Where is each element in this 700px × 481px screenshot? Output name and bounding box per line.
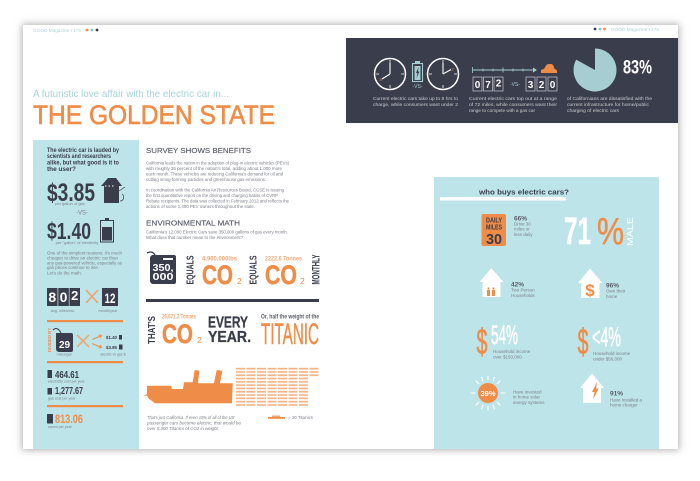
pie chart: 83 percent <box>574 48 617 91</box>
text block: california caption: over 5,300 Titanics of CO2 in weight. <box>147 426 219 431</box>
stat: gas cost per year <box>48 386 83 400</box>
counter: 802 miles per month <box>47 288 80 306</box>
legend: 20 titanics <box>268 415 314 420</box>
charging caption: charge, while consumers want under 2 <box>373 102 458 108</box>
icon: daily miles 30 sign: 30 <box>486 231 502 248</box>
stat: 96 percent: Own their <box>606 288 626 294</box>
counter: 12 months: 12 <box>104 290 116 306</box>
text block: california caption: passenger cars became electric, that would be <box>146 420 241 426</box>
text block: survey paragraph one <box>146 160 289 183</box>
stat: 42 percent: Households <box>511 293 536 298</box>
text block: california caption: That's just California. If even 10% of all of the US' <box>147 415 236 420</box>
stat: 83 percent: 83% <box>623 58 652 78</box>
stat: 91 percent: Have installed a <box>610 398 643 402</box>
icon: sun 39 percent <box>471 376 505 410</box>
stat: every year <box>208 314 251 346</box>
counter: 320 miles <box>526 77 557 91</box>
text block: survey paragraph two <box>146 188 289 210</box>
icon: clock 2 hours <box>428 58 458 90</box>
stat: 26,671.2 tonnes CO2: 2 <box>197 335 202 345</box>
dissatisfaction caption: current infrastructure for home/public <box>567 102 650 108</box>
explanatory paragraph: any gas-powered vehicle, especially as <box>47 260 123 266</box>
text block: environmental intro: What does that number mean to the environment? <box>146 235 243 241</box>
caption: miles per month: avg. miles/mo. <box>51 309 75 313</box>
stat: 91 percent: 91% <box>610 390 623 398</box>
intro text: alike, but what good is it to <box>47 160 119 166</box>
stat: 91 percent: home charger <box>610 402 638 408</box>
stat: income over 150k: Household income <box>493 349 531 354</box>
icon: house with two people <box>480 268 504 297</box>
stat: saved per year: saved per year <box>48 425 73 429</box>
label: divided by: DIVIDED BY <box>47 328 52 352</box>
explanatory paragraph <box>47 250 123 276</box>
heading: survey shows benefits: SURVEY SHOWS BENEFITS <box>146 146 251 155</box>
text block: environmental intro: California's 12,000 Electric Cars save 350,000 gallons of gas every month. <box>146 230 288 236</box>
stat: 42 percent: 42% <box>511 282 524 288</box>
stat: 42 percent <box>511 282 536 298</box>
counter: 802 miles per month: 8 <box>48 289 56 305</box>
stat: electricity price: $1.40 <box>47 218 91 244</box>
dissatisfaction caption: of Californians are dissatisfied with the <box>567 96 652 102</box>
arrow: range scale <box>472 67 537 73</box>
range caption: range to compete with a gas car <box>469 108 535 114</box>
stat: income over 150k <box>476 320 531 362</box>
panel: cost sidebar <box>33 140 139 449</box>
icon: gas pump <box>101 178 125 203</box>
icon: clock 8 hours <box>374 58 406 90</box>
stat: 4,900,000 lbs CO2: CO <box>202 260 233 290</box>
divider bar <box>47 405 123 407</box>
heading: environmental math: ENVIRONMENTAL MATH <box>146 218 240 228</box>
caption: miles per gallon: miles/gal <box>57 352 72 356</box>
text block: survey paragraph one: each month. These vehicles are reducing California's demand for oil and <box>146 172 283 178</box>
text block: survey paragraph two: actions of some 1,400 PEV owners throughout the state. <box>146 204 255 210</box>
icon: battery <box>100 218 114 242</box>
stat: 66 percent: Drive 30 <box>514 222 531 226</box>
counter: 072 miles: 0 <box>475 80 481 91</box>
right page header: GOOD Magazine I 179 <box>611 27 659 33</box>
caption: per gallon of electricity: per "gallon" of electricity <box>56 240 98 245</box>
text block: survey paragraph one: with roughly 35 percent of the nation's total, adding about 1,000 more <box>146 166 282 172</box>
arrows: electric vs gas <box>92 335 102 348</box>
stat: every year: EVERY <box>208 314 248 332</box>
caption: per gallon of gas: per gallon of gas <box>55 201 85 206</box>
stat: solar: Have invested <box>513 390 542 394</box>
stat: 4,900,000 lbs CO2: 4,900,000lbs <box>202 256 237 262</box>
explanatory paragraph: One of the simplest reasons: it's much <box>47 250 122 256</box>
label: equals: EQUALS <box>248 255 260 284</box>
panel: who buys electric cars <box>434 177 659 449</box>
icon: titanic ship silhouette <box>143 370 233 403</box>
counter: 320 miles: 0 <box>550 80 556 91</box>
label: that's: THAT'S <box>146 316 158 344</box>
icon: daily miles 30 sign: DAILY <box>486 218 502 224</box>
stat: 71 percent male: % <box>597 211 624 253</box>
stat: solar: energy systems <box>513 400 545 405</box>
stat: gas cost: $3.85 <box>106 345 117 350</box>
icon: house with dollar: $ <box>585 281 595 300</box>
counter: 802 miles per month: 2 <box>71 288 78 303</box>
icon: clock 2 hours: 2 <box>452 66 454 72</box>
counter: 802 miles per month: 0 <box>60 289 68 305</box>
label: equals: EQUALS <box>186 255 196 284</box>
counter: 320 miles: 2 <box>539 80 545 91</box>
stat: 71 percent male: MALE <box>625 217 635 246</box>
range caption: of 72 miles, while consumers want their <box>469 102 557 108</box>
subtitle: A futuristic love affair with the electric car in... <box>33 88 229 100</box>
stat: income over 150k: $ <box>476 321 488 362</box>
icon: daily miles 30 sign: MILES <box>486 224 502 232</box>
explanatory paragraph: gas prices continue to rise. <box>47 265 99 270</box>
left page header <box>33 28 98 34</box>
icon: sun 39 percent: 39% <box>480 389 496 398</box>
text block: environmental intro <box>146 230 288 241</box>
icon: orange car <box>541 64 557 73</box>
stat: 66 percent <box>514 216 533 237</box>
stat: gas cost per year: gas cost per year <box>48 396 76 400</box>
stat: 96 percent: 96% <box>606 282 619 290</box>
divider bar <box>146 299 319 302</box>
stat: 71 percent male <box>564 211 635 253</box>
stat: electricity cost per year <box>48 370 86 384</box>
icon: multiply <box>77 335 89 347</box>
vs label: -VS- <box>510 82 520 88</box>
counter: 072 miles: 2 <box>496 78 502 90</box>
counter: 320 miles: 3 <box>528 80 534 91</box>
stat: 26,671.2 tonnes CO2: CO <box>162 319 193 349</box>
range caption: Current electric cars top out at a range <box>469 96 557 102</box>
heading underline <box>440 197 566 200</box>
stat: 2222.6 tonnes CO2: CO <box>265 260 297 290</box>
charging caption: Current electric cars take up to 8 hrs to <box>373 96 458 102</box>
dissatisfaction caption: charging of electric cars <box>567 108 620 114</box>
intro text: The electric car is lauded by <box>47 148 120 154</box>
icon: house with bolt <box>580 374 604 403</box>
dissatisfaction caption <box>567 96 652 114</box>
intro text: the user? <box>47 167 76 173</box>
stat: electric cost: $1.40 <box>106 335 117 340</box>
panel: charging and range banner <box>346 38 678 123</box>
stat: every year: YEAR. <box>208 329 251 346</box>
icon: daily miles 30 sign <box>482 214 506 248</box>
icon: gas can 350,000: 000 <box>152 272 174 283</box>
label: monthly: MONTHLY <box>310 254 322 284</box>
text block: survey paragraph two: the first quantitative report on the driving and charging habits of CVRP <box>146 193 278 199</box>
stat: 42 percent: Two Person <box>511 288 535 292</box>
stat: gas cost <box>106 344 122 350</box>
stat: 96 percent <box>606 282 626 299</box>
explanatory paragraph: cheaper to drive an electric car than <box>47 256 118 260</box>
chart: grid of 20 titanics <box>236 367 320 407</box>
text block: survey paragraph two: Rebate recipients. The data was collected in February 2012 and reflects the <box>146 198 289 204</box>
stat: solar <box>513 390 545 405</box>
charging caption <box>373 96 458 108</box>
text block: california caption <box>146 415 241 431</box>
counter: 12 months <box>102 288 118 306</box>
stat: electricity cost per year: 464.61 <box>55 370 79 381</box>
left page header: GOOD Magazine I 178 <box>33 28 81 34</box>
stat: saved per year: 813.06 <box>55 414 83 426</box>
stat: saved per year <box>47 414 83 429</box>
stat: 96 percent: home <box>606 294 618 299</box>
caption: months per year: month/year <box>98 309 118 313</box>
icon: house with dollar <box>578 268 602 300</box>
stat: solar: in home solar <box>513 394 541 400</box>
text: half the weight of the: Or, half the weight of the <box>261 314 319 320</box>
stat: income under 50k: under $50,000 <box>593 356 623 362</box>
stat: 2222.6 tonnes CO2: 2 <box>300 276 305 286</box>
icon: battery charging: -VS- <box>412 84 423 90</box>
icon: gas can 29 <box>53 329 73 352</box>
text: titanic: TITANIC <box>261 318 319 351</box>
stat: 66 percent: miles or <box>514 226 530 232</box>
stat: 2222.6 tonnes CO2: 2222.6 Tonnes <box>265 256 302 262</box>
stat: income over 150k: 54% <box>491 320 518 350</box>
vs label: -VS- <box>76 210 88 216</box>
intro text: scientists and researchers <box>47 154 112 160</box>
stat: gas price: $3.85 <box>47 179 95 207</box>
range caption <box>469 96 557 114</box>
icon: gas can 350,000: 350, <box>152 263 174 274</box>
heading: who buys electric cars? <box>478 188 569 196</box>
legend: 20 titanics: = 20 Titanics <box>288 415 314 420</box>
explanatory paragraph: Let's do the math. <box>47 270 82 276</box>
divider bar <box>47 320 123 322</box>
stat: gas cost per year: 1,277.67 <box>55 386 83 397</box>
stat: electricity cost per year: electricity cost per year <box>48 380 86 384</box>
icon: gas can 350,000 <box>147 252 176 284</box>
stat: 66 percent: 66% <box>514 216 527 222</box>
divider bar <box>47 361 123 363</box>
counter: 072 miles <box>473 77 503 91</box>
stat: 26,671.2 tonnes CO2: 26,671.2 Tonnes <box>162 314 196 320</box>
right page header <box>594 27 659 33</box>
stat: income under 50k: Household income <box>593 351 631 356</box>
title: THE GOLDEN STATE <box>33 100 275 130</box>
stat: 4,900,000 lbs CO2: 2 <box>237 276 242 286</box>
icon: battery charging <box>412 61 423 90</box>
stat: 66 percent: less daily <box>514 232 533 237</box>
icon: gas can 29: 29 <box>59 340 70 351</box>
stat: 71 percent male: 71 <box>564 211 591 253</box>
counter: 072 miles: 7 <box>485 80 491 91</box>
intro text <box>47 148 120 173</box>
icon: clock 8 hours: 8 <box>380 77 382 82</box>
text block: survey paragraph one: cutting smog-forming particles and greenhouse gas emissions. <box>146 177 266 183</box>
stat: income under 50k: $ <box>578 321 588 362</box>
text block: survey paragraph two: In coordination with the California Air Resources Board, CCSE is issuing <box>146 188 284 194</box>
icon: multiply <box>86 290 98 303</box>
stat: income under 50k: <4% <box>592 322 621 352</box>
text block: survey paragraph one: California leads the nation in the adoption of plug-in electric vehicles (PEVs) <box>146 160 289 166</box>
stat: income over 150k: over $150,000 <box>493 354 522 360</box>
stat: income under 50k <box>578 321 631 362</box>
stat: 91 percent <box>610 390 643 408</box>
caption: electric vs gas: electric vs gas $ <box>100 352 126 356</box>
